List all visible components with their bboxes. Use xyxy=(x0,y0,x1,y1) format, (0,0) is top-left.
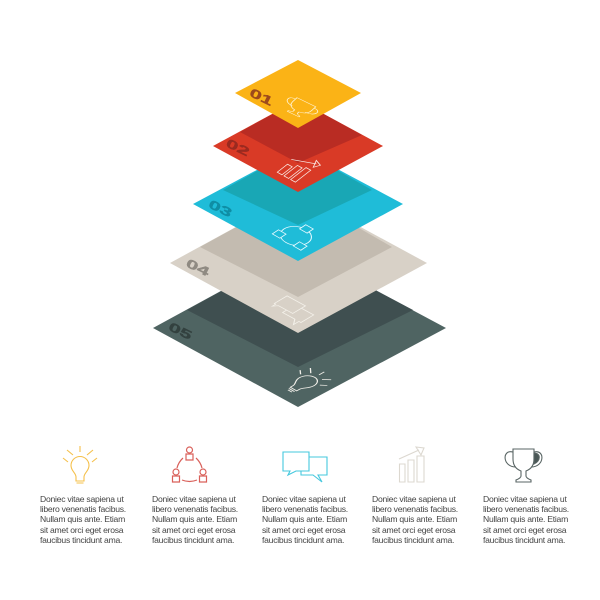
text block 1: Doniec vitae sapiena ut xyxy=(40,494,124,504)
icon: group of people xyxy=(172,447,206,482)
text block 2: faucibus tincidunt ama. xyxy=(152,535,234,545)
layer 01: 01 xyxy=(247,85,275,109)
text block 1: faucibus tincidunt ama. xyxy=(40,535,122,545)
text block 3: faucibus tincidunt ama. xyxy=(262,535,344,545)
text block 4 xyxy=(372,494,458,545)
layer 02 xyxy=(213,100,383,192)
text block 5: faucibus tincidunt ama. xyxy=(483,535,565,545)
text block 3 xyxy=(262,494,348,545)
text block 5 xyxy=(483,494,569,545)
text block 5: libero venenatis facibus. xyxy=(483,504,569,514)
layer 03 xyxy=(193,148,403,261)
icon: trophy xyxy=(505,449,542,482)
text block 4: Doniec vitae sapiena ut xyxy=(372,494,456,504)
layer 04: 04 xyxy=(184,256,212,279)
text block 1: libero venenatis facibus. xyxy=(40,504,126,514)
text block 1: Nullam quis ante. Etiam xyxy=(40,514,125,524)
text block 2 xyxy=(152,494,238,545)
text block 3: sit amet orci eget erosa xyxy=(262,525,345,535)
layer 04 xyxy=(170,193,427,333)
text block 4: Nullam quis ante. Etiam xyxy=(372,514,457,524)
layer 05 xyxy=(153,249,446,407)
text block 2: libero venenatis facibus. xyxy=(152,504,238,514)
text block 4: faucibus tincidunt ama. xyxy=(372,535,454,545)
icon: light bulb xyxy=(63,446,97,483)
text block 2: Nullam quis ante. Etiam xyxy=(152,514,237,524)
layer 02: 02 xyxy=(224,136,252,159)
text block 3: Nullam quis ante. Etiam xyxy=(262,514,347,524)
icon: speech bubbles xyxy=(283,452,327,482)
text block 4: libero venenatis facibus. xyxy=(372,504,458,514)
text block 1: sit amet orci eget erosa xyxy=(40,525,123,535)
text block 1 xyxy=(40,494,126,545)
layer 01 xyxy=(235,60,361,128)
text block 5: sit amet orci eget erosa xyxy=(483,525,566,535)
text block 2: Doniec vitae sapiena ut xyxy=(152,494,236,504)
text block 4: sit amet orci eget erosa xyxy=(372,525,455,535)
text block 5: Nullam quis ante. Etiam xyxy=(483,514,568,524)
icon: growth chart xyxy=(399,447,424,482)
text block 3: libero venenatis facibus. xyxy=(262,504,348,514)
text block 3: Doniec vitae sapiena ut xyxy=(262,494,346,504)
layer 03: 03 xyxy=(206,197,234,220)
layer 05: 05 xyxy=(166,319,194,343)
text block 5: Doniec vitae sapiena ut xyxy=(483,494,567,504)
text block 2: sit amet orci eget erosa xyxy=(152,525,235,535)
